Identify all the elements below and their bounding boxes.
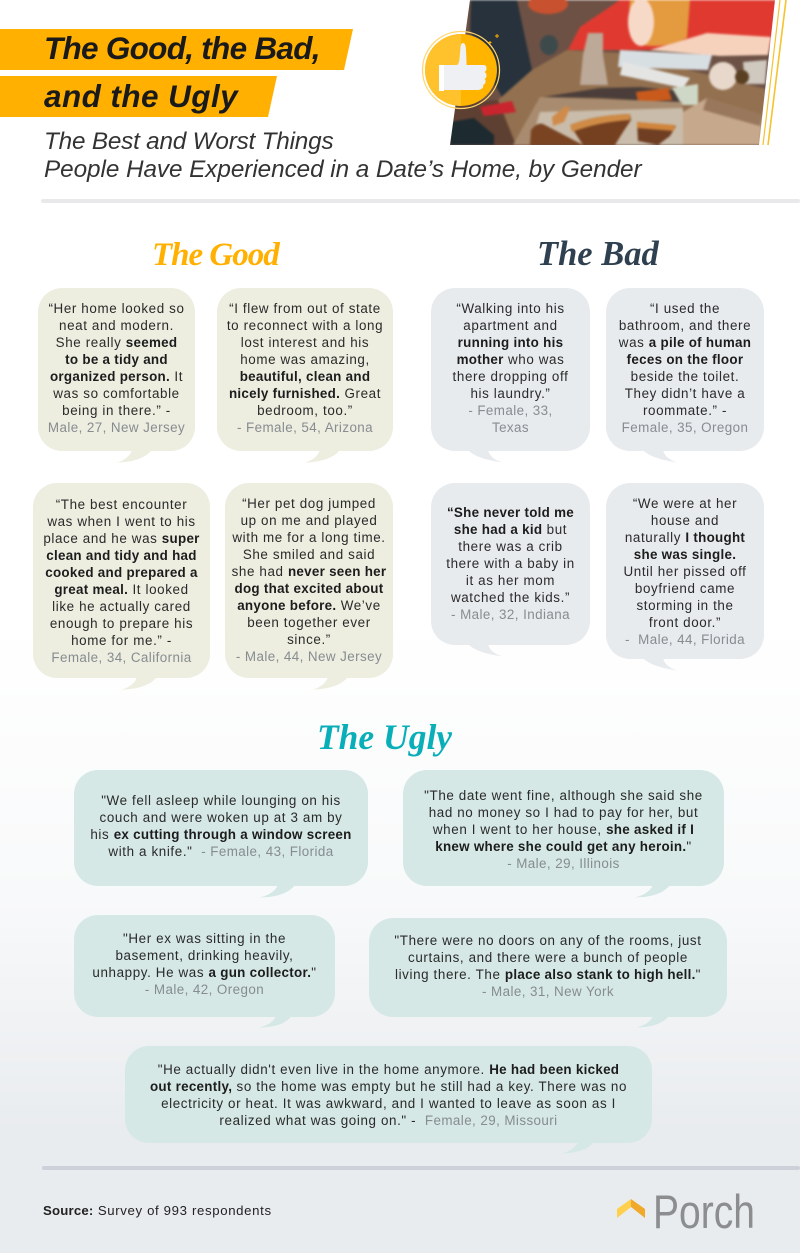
ugly quote 5: "He actually didn't even live in the home anymore. He had been kicked bbox=[158, 1062, 619, 1076]
bad quote 1: - Female, 33, bbox=[468, 402, 553, 418]
ugly quote 4: - Male, 31, New York bbox=[482, 984, 614, 998]
bad quote 1: Texas bbox=[492, 420, 529, 434]
subtitle: People Have Experienced in a Date’s Home, by Gender bbox=[44, 156, 642, 183]
bad quote 1 bbox=[431, 288, 590, 451]
bad quote 3: watched the kids.” bbox=[451, 590, 570, 604]
subtitle bbox=[44, 128, 642, 183]
good quote 2: beautiful, clean and bbox=[240, 368, 370, 384]
title: The Good, the Bad, bbox=[44, 30, 320, 66]
bad quote 4: - Male, 44, Florida bbox=[625, 632, 745, 646]
good quote 1: organized person. It bbox=[50, 368, 183, 384]
ugly quote 5 bbox=[125, 1046, 652, 1143]
bad quote 3: there was a crib bbox=[458, 538, 563, 554]
good quote 4: “Her pet dog jumped bbox=[242, 496, 376, 511]
good quote 1: was so comfortable bbox=[53, 386, 180, 400]
bad quote 4: boyfriend came bbox=[635, 580, 735, 596]
good quote 3 bbox=[33, 483, 210, 678]
good quote 1: neat and modern. bbox=[59, 318, 174, 332]
good quote 4: anyone before. We’ve bbox=[237, 598, 381, 613]
ugly quote 3: "Her ex was sitting in the bbox=[123, 930, 286, 946]
bad quote 3: there with a baby in bbox=[446, 556, 575, 570]
good quote 1: “Her home looked so bbox=[48, 300, 185, 316]
bad quote 2: They didn’t have a bbox=[625, 386, 745, 400]
good quote 4: - Male, 44, New Jersey bbox=[236, 649, 382, 664]
ugly quote 4: living there. The place also stank to high hell." bbox=[395, 966, 701, 982]
ugly quote 4 bbox=[369, 918, 727, 1017]
good quote 1: She really seemed bbox=[56, 334, 177, 350]
good quote 4: up on me and played bbox=[241, 513, 377, 528]
bad quote 4: house and bbox=[651, 512, 719, 528]
bad quote 2: Female, 35, Oregon bbox=[622, 420, 748, 434]
good quote 3: great meal. It looked bbox=[54, 582, 189, 596]
ugly quote 2: knew where she could get any heroin." bbox=[435, 838, 692, 854]
heading: The Ugly: The Ugly bbox=[317, 717, 452, 757]
good quote 3: “The best encounter bbox=[56, 496, 187, 512]
ugly quote 3 bbox=[74, 915, 335, 1017]
good quote 4: been together ever bbox=[247, 615, 371, 630]
bad quote 2: beside the toilet. bbox=[631, 368, 739, 384]
icon: thumbs up badge bbox=[422, 30, 500, 110]
good quote 4: since.” bbox=[287, 632, 331, 647]
bad quote 4: storming in the bbox=[636, 598, 734, 612]
bad quote 3: - Male, 32, Indiana bbox=[451, 606, 570, 622]
title banner bbox=[0, 29, 353, 117]
good quote 3: place and he was super bbox=[43, 530, 200, 546]
bad quote 1: there dropping off bbox=[453, 368, 568, 384]
bad quote 2: bathroom, and there bbox=[619, 318, 751, 332]
bad quote 2: “I used the bbox=[650, 300, 720, 316]
good quote 4: She smiled and said bbox=[243, 547, 375, 562]
bad quote 1: “Walking into his bbox=[456, 300, 565, 316]
divider bbox=[41, 199, 800, 203]
good quote 3: enough to prepare his bbox=[50, 616, 193, 630]
bad quote 1: mother who was bbox=[457, 352, 564, 366]
good quote 2: bedroom, too.” bbox=[257, 402, 353, 418]
good quote 4: with me for a long time. bbox=[232, 530, 386, 545]
bad quote 3 bbox=[431, 483, 590, 645]
bad quote 2: roommate.” - bbox=[643, 402, 727, 418]
good quote 2 bbox=[217, 288, 393, 451]
footer divider bbox=[42, 1166, 800, 1170]
good quote 1: to be a tidy and bbox=[65, 352, 168, 366]
bad quote 4: naturally I thought bbox=[625, 530, 745, 544]
good quote 2: lost interest and his bbox=[241, 334, 369, 350]
good quote 3: clean and tidy and had bbox=[46, 548, 197, 562]
bad quote 1: apartment and bbox=[463, 318, 558, 332]
bad quote 2: was a pile of human bbox=[619, 334, 751, 350]
ugly quote 1: his ex cutting through a window screen bbox=[90, 826, 352, 842]
bad quote 4 bbox=[606, 483, 764, 659]
good quote 2: nicely furnished. Great bbox=[229, 386, 381, 400]
bad quote 4: “We were at her bbox=[633, 496, 737, 510]
ugly quote 2 bbox=[403, 770, 724, 886]
source note: Source: Survey of 993 respondents bbox=[43, 1203, 272, 1218]
good quote 2: home was amazing, bbox=[240, 352, 370, 366]
ugly quote 1: with a knife." - Female, 43, Florida bbox=[108, 844, 334, 858]
bad quote 2 bbox=[606, 288, 764, 451]
good quote 3: home for me.” - bbox=[71, 632, 172, 648]
good quote 1: Male, 27, New Jersey bbox=[48, 420, 185, 434]
good quote 4: she had never seen her bbox=[232, 564, 386, 579]
title bbox=[44, 30, 320, 114]
logo: Porch: Porch bbox=[653, 1185, 755, 1238]
good quote 3: like he actually cared bbox=[52, 598, 191, 614]
title: and the Ugly bbox=[44, 78, 238, 114]
good quote 4 bbox=[225, 483, 393, 678]
good quote 3: Female, 34, California bbox=[51, 650, 192, 664]
ugly quote 3: basement, drinking heavily, bbox=[115, 948, 294, 962]
good quote 2: to reconnect with a long bbox=[227, 318, 383, 332]
ugly quote 5: realized what was going on." - Female, 29, Missouri bbox=[219, 1112, 558, 1128]
ugly quote 4: "There were no doors on any of the rooms, just bbox=[394, 932, 702, 948]
ugly quote 2: - Male, 29, Illinois bbox=[507, 856, 620, 870]
ugly quote 2: "The date went fine, although she said she bbox=[424, 788, 703, 802]
good quote 1 bbox=[38, 288, 195, 451]
ugly quote 3: unhappy. He was a gun collector." bbox=[92, 964, 317, 980]
ugly quote 2: when I went to her house, she asked if I bbox=[433, 822, 694, 836]
good quote 2: “I flew from out of state bbox=[229, 300, 381, 316]
bad quote 1: running into his bbox=[458, 334, 563, 350]
bad quote 2: feces on the floor bbox=[627, 352, 743, 366]
ugly quote 5: out recently, so the home was empty but he still had a key. There was no bbox=[150, 1078, 627, 1094]
bad quote 3: she had a kid but bbox=[454, 522, 567, 536]
ugly quote 1 bbox=[74, 770, 368, 886]
ugly quote 2: had no money so I had to pay for her, but bbox=[429, 804, 698, 820]
subtitle: The Best and Worst Things bbox=[44, 128, 333, 155]
bad quote 4: Until her pissed off bbox=[623, 564, 747, 578]
ugly quote 4: curtains, and there were a bunch of people bbox=[408, 950, 688, 964]
heading: The Good: The Good bbox=[152, 237, 279, 273]
bad quote 3: “She never told me bbox=[447, 504, 574, 520]
ugly quote 1: couch and were woken up at 3 am by bbox=[100, 810, 342, 824]
bad quote 1: his laundry.” bbox=[470, 386, 550, 400]
bad quote 4: she was single. bbox=[634, 546, 736, 562]
heading: The Bad: The Bad bbox=[537, 235, 659, 273]
bad quote 3: it as her mom bbox=[466, 572, 555, 588]
good quote 2: - Female, 54, Arizona bbox=[237, 420, 373, 434]
good quote 3: was when I went to his bbox=[47, 514, 196, 528]
good quote 3: cooked and prepared a bbox=[45, 564, 198, 580]
ugly quote 3: - Male, 42, Oregon bbox=[145, 982, 264, 996]
ugly quote 5: electricity or heat. It was awkward, and I wanted to leave as soon as I bbox=[161, 1096, 616, 1110]
ugly quote 1: "We fell asleep while lounging on his bbox=[101, 792, 341, 808]
header photo: messy table with pizza bbox=[450, 0, 787, 146]
bad quote 4: front door.” bbox=[649, 614, 721, 630]
good quote 4: dog that excited about bbox=[234, 581, 384, 596]
good quote 1: being in there.” - bbox=[62, 402, 171, 418]
